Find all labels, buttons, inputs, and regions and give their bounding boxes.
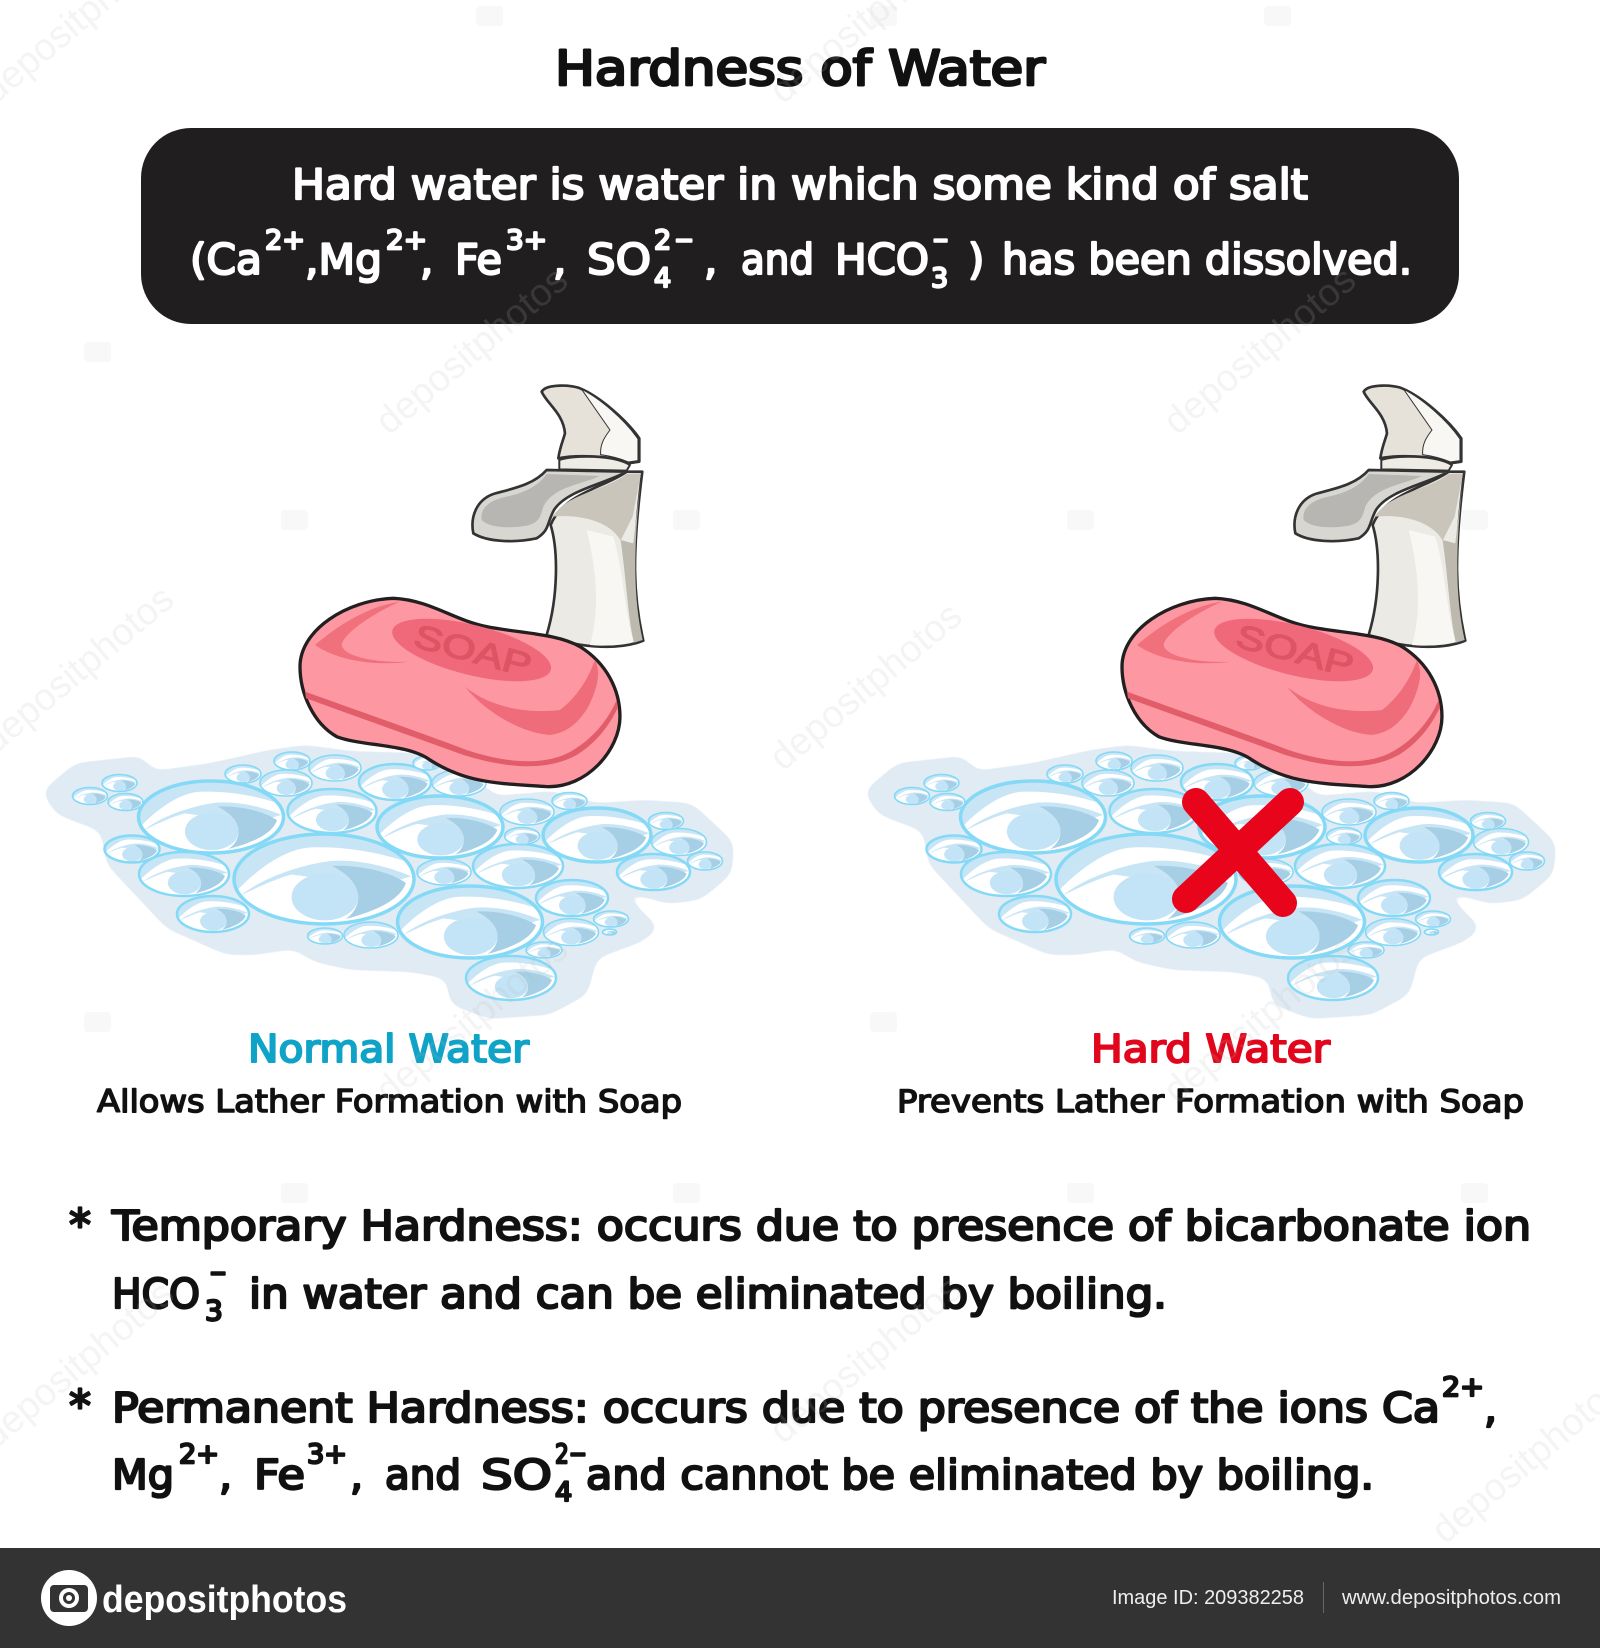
text block: permanent hardness: Permanent Hardness: occurs due to presence of the ions Ca	[112, 1384, 1440, 1432]
definition banner: 3	[931, 263, 948, 294]
definition banner: ,	[704, 235, 717, 284]
icon: red cross	[1186, 802, 1290, 903]
icon: soap bar	[1122, 598, 1442, 787]
icon: faucet	[472, 386, 643, 647]
definition banner: 4	[654, 263, 671, 294]
definition banner: 2	[654, 225, 671, 256]
definition banner: Hard water is water in which some kind of salt	[292, 160, 1308, 209]
caption: normal water: Allows Lather Formation with Soap	[97, 1084, 682, 1120]
watermark: depositphotos	[1156, 928, 1364, 1112]
text block: permanent hardness: Mg	[112, 1451, 174, 1499]
watermark: depositphotos	[762, 595, 970, 779]
panel: hard water	[866, 386, 1554, 1120]
text block: permanent hardness: 2−	[555, 1439, 587, 1470]
text block: temporary hardness	[69, 1200, 1531, 1327]
text block: permanent hardness	[69, 1372, 1497, 1508]
lather bubbles	[44, 747, 732, 1017]
icon: soap bar	[300, 598, 620, 787]
text block: permanent hardness: and cannot be eliminated by boiling.	[586, 1451, 1374, 1499]
text block: permanent hardness: 2+	[1442, 1372, 1484, 1403]
text block: temporary hardness: −	[209, 1258, 227, 1289]
icon: depositphotos logo	[41, 1570, 97, 1626]
definition banner: )	[968, 235, 984, 284]
text block: temporary hardness: Temporary Hardness: occurs due to presence of bicarbonate ion	[111, 1202, 1531, 1250]
definition banner: (Ca	[190, 235, 262, 284]
definition banner: 2+	[265, 225, 305, 256]
text block: temporary hardness: in water and can be eliminated by boiling.	[249, 1270, 1167, 1318]
text block: permanent hardness: ,	[350, 1451, 363, 1499]
definition banner: 3+	[506, 225, 547, 256]
text block: permanent hardness: 3+	[307, 1439, 347, 1470]
watermark: depositphotos	[762, 1268, 970, 1452]
definition banner: ,	[553, 235, 566, 284]
caption: hard water: Prevents Lather Formation with Soap	[897, 1084, 1524, 1120]
label: normal water: Normal Water	[248, 1027, 529, 1071]
text block: permanent hardness: ,	[1484, 1384, 1497, 1432]
definition banner: Fe	[455, 235, 502, 284]
text block: temporary hardness: *	[69, 1200, 91, 1251]
definition banner: ,	[420, 235, 433, 284]
text block: permanent hardness: 4	[555, 1477, 572, 1508]
definition banner: and	[741, 235, 814, 284]
text block: permanent hardness: 2+	[179, 1439, 219, 1470]
definition banner: −	[932, 225, 949, 256]
definition banner: −	[674, 225, 694, 256]
watermark: depositphotos	[368, 259, 576, 443]
text block: temporary hardness: HCO	[112, 1270, 200, 1318]
footer bar	[0, 1548, 1600, 1648]
definition banner: 2+	[386, 225, 427, 256]
definition banner	[141, 128, 1459, 324]
text block: permanent hardness: and	[385, 1451, 461, 1499]
definition banner: HCO	[835, 235, 929, 284]
label: hard water: Hard Water	[1091, 1027, 1330, 1071]
lather bubbles	[866, 747, 1554, 1017]
definition banner: ,Mg	[305, 235, 382, 284]
logo wordmark: depositphotos	[102, 1579, 347, 1621]
watermark: depositphotos	[368, 928, 576, 1112]
image id: Image ID: 209382258	[1112, 1587, 1304, 1609]
text block: temporary hardness: 3	[205, 1294, 223, 1327]
text block: permanent hardness: SO	[481, 1451, 552, 1499]
icon: faucet	[1294, 386, 1465, 647]
title: Hardness of Water	[555, 41, 1045, 97]
definition banner: has been dissolved.	[1002, 235, 1412, 284]
text block: permanent hardness: Fe	[254, 1451, 305, 1499]
panel: normal water	[44, 386, 732, 1120]
watermark: depositphotos	[1156, 259, 1364, 443]
website: www.depositphotos.com	[1341, 1587, 1561, 1609]
text block: permanent hardness: ,	[219, 1451, 232, 1499]
definition banner: SO	[587, 235, 651, 284]
text block: permanent hardness: *	[69, 1381, 91, 1432]
